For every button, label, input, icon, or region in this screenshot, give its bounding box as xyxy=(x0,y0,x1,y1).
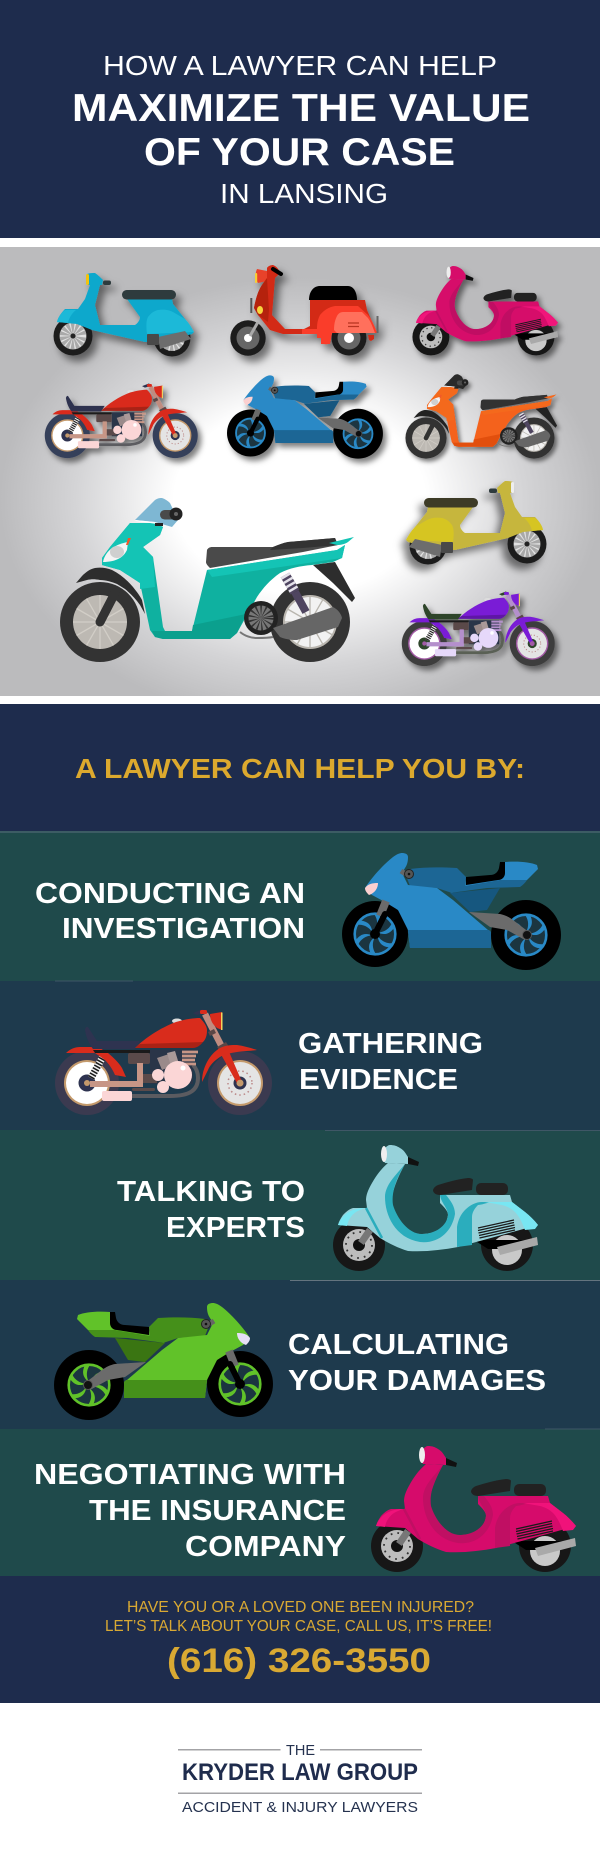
call to action text: HAVE YOU OR A LOVED ONE BEEN INJURED? xyxy=(127,1599,474,1616)
text: EXPERTS xyxy=(166,1212,305,1244)
phone number: (616) 326-3550 xyxy=(167,1642,431,1680)
icon: red motorcycle xyxy=(55,1009,272,1115)
title line 1: HOW A LAWYER CAN HELP xyxy=(103,50,497,81)
text: CALCULATING xyxy=(288,1329,509,1361)
logo: the: THE xyxy=(286,1743,315,1759)
title line 2: MAXIMIZE THE VALUE xyxy=(72,87,530,130)
icon: blue scooter xyxy=(54,273,194,356)
icon: green sport bike xyxy=(54,1303,273,1420)
panel: header xyxy=(0,0,600,238)
panel: calculating your damages xyxy=(0,1280,600,1429)
panel: gathering evidence xyxy=(0,981,600,1130)
icon: pink scooter xyxy=(371,1446,576,1572)
icon: pink scooter xyxy=(412,266,558,355)
panel: conducting an investigation xyxy=(0,831,600,981)
icon: teal scooter large xyxy=(60,498,355,662)
panel: talking to experts xyxy=(0,1130,600,1280)
text: CONDUCTING AN xyxy=(35,878,305,910)
logo: firm name: KRYDER LAW GROUP xyxy=(182,1759,418,1786)
icon: yellow scooter xyxy=(406,481,546,564)
text: COMPANY xyxy=(185,1531,346,1563)
panel: lawyer can help heading xyxy=(0,704,600,831)
call to action text: LET’S TALK ABOUT YOUR CASE, CALL US, IT’S FREE! xyxy=(105,1618,492,1635)
icon: orange scooter xyxy=(405,374,557,459)
text: GATHERING xyxy=(298,1028,483,1060)
logo xyxy=(178,1743,422,1816)
text: TALKING TO xyxy=(117,1176,305,1208)
text: EVIDENCE xyxy=(299,1064,458,1096)
title line 4: IN LANSING xyxy=(220,178,388,209)
text: NEGOTIATING WITH xyxy=(34,1459,346,1491)
icon: blue sport bike xyxy=(227,375,383,459)
text: YOUR DAMAGES xyxy=(288,1365,546,1397)
panel: negotiating with the insurance company xyxy=(0,1429,600,1576)
icon: light blue scooter xyxy=(333,1145,538,1271)
panel: motorcycle collection xyxy=(0,247,600,696)
text: THE INSURANCE xyxy=(89,1495,346,1527)
logo: tagline: ACCIDENT & INJURY LAWYERS xyxy=(182,1799,418,1816)
title line 3: OF YOUR CASE xyxy=(144,131,455,174)
panel: call to action xyxy=(0,1576,600,1703)
icon: red scooter xyxy=(230,265,378,356)
heading: A LAWYER CAN HELP YOU BY: xyxy=(75,753,525,784)
icon: red motorcycle xyxy=(45,383,198,458)
text: INVESTIGATION xyxy=(62,913,305,945)
icon: blue sport bike xyxy=(342,853,561,970)
icon: purple motorcycle xyxy=(402,591,555,666)
